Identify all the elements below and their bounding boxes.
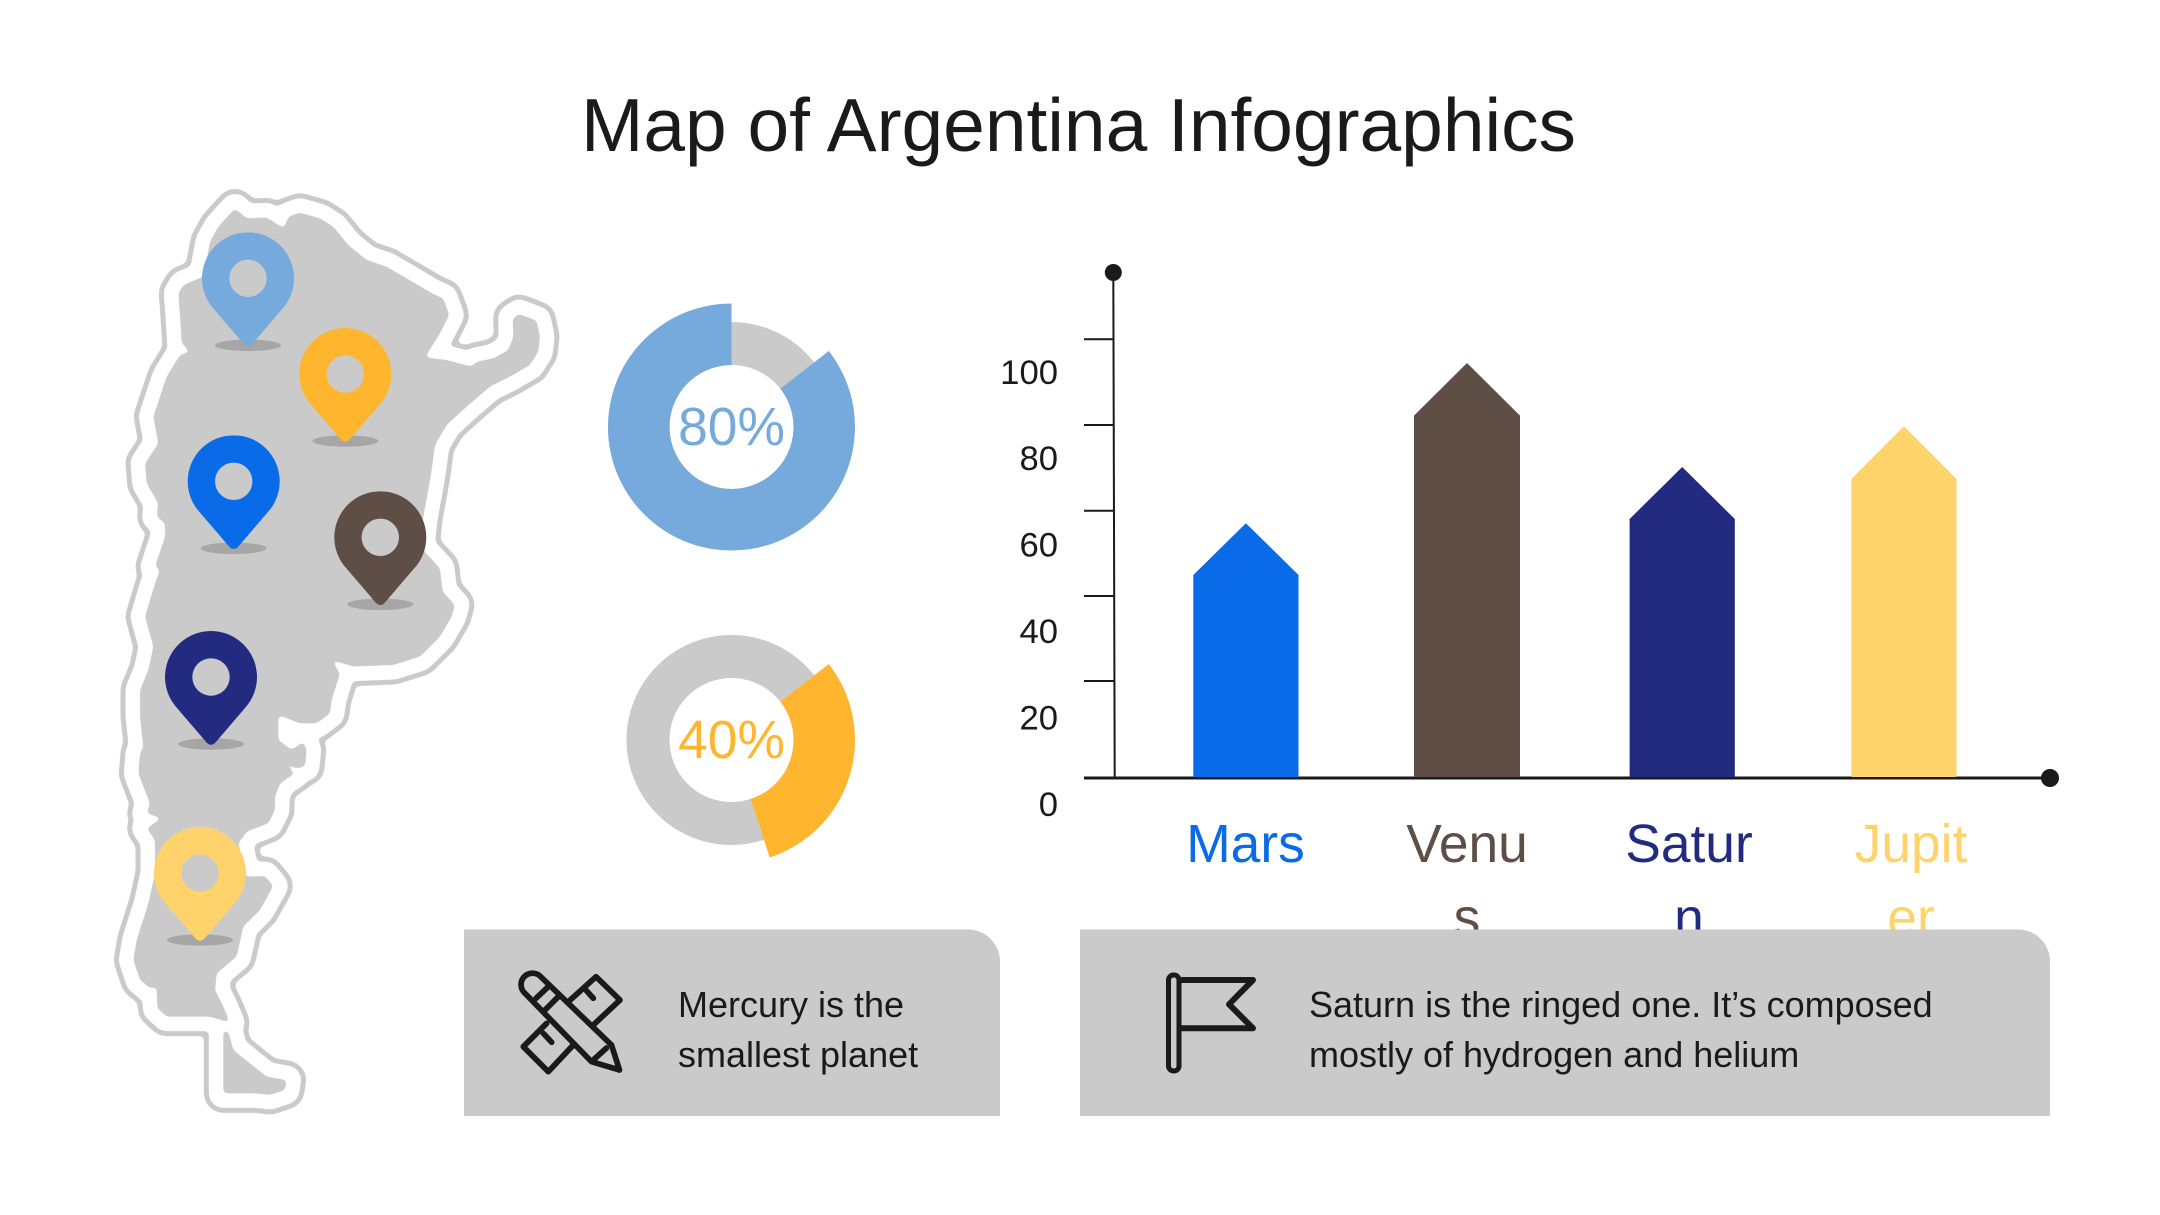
- title: Map of Argentina Infographics: [581, 83, 1576, 167]
- pin: brown: [334, 491, 426, 610]
- y axis labels: 60: [1019, 526, 1058, 564]
- donut chart: 40%: 40%: [678, 711, 785, 770]
- icon: pencil and ruler: [521, 973, 620, 1072]
- bar: Saturn: [1630, 467, 1735, 777]
- text: Saturn: mostly of hydrogen and helium: [1309, 1034, 1799, 1075]
- donut chart: 80%: 80%: [678, 398, 785, 457]
- map of Argentina with pins: [133, 208, 540, 1095]
- pin: orange: [299, 328, 391, 447]
- panel: Mercury: [464, 930, 1000, 1116]
- label: Jupiter: er: [1887, 889, 1935, 948]
- label: Venus: s: [1454, 889, 1480, 948]
- bar chart: [1000, 264, 2059, 948]
- map silhouette with offset outline: [133, 208, 540, 1095]
- label: Jupiter: Jupit: [1855, 815, 1968, 874]
- y axis labels: [1000, 354, 1058, 824]
- donut chart: 80%: [608, 304, 855, 550]
- bar: Venus: [1414, 363, 1520, 777]
- text: Mercury: smallest planet: [678, 1034, 918, 1075]
- y axis labels: 100: [1000, 354, 1058, 392]
- bar: Mars: [1193, 523, 1298, 777]
- pin: yellow: [154, 827, 246, 946]
- label: Saturn: Satur: [1625, 815, 1753, 874]
- label: Saturn: n: [1674, 889, 1704, 948]
- y axis labels: 80: [1019, 440, 1058, 478]
- y axis labels: 0: [1039, 786, 1058, 824]
- y axis labels: 40: [1019, 613, 1058, 651]
- donut chart: 40%: [648, 656, 855, 858]
- axes: [1084, 264, 2059, 787]
- text: Mercury: Mercury is the: [678, 984, 904, 1025]
- pin: navy: [165, 631, 257, 750]
- y axis labels: 20: [1019, 700, 1058, 738]
- pin: blue: [188, 435, 280, 554]
- bar: Jupiter: [1851, 426, 1956, 777]
- panel: Saturn: [1080, 930, 2050, 1116]
- label: Mars: Mars: [1186, 815, 1305, 874]
- label: Venus: Venu: [1406, 815, 1528, 874]
- icon: flag: [1168, 975, 1253, 1071]
- text: Saturn: Saturn is the ringed one. It’s composed: [1309, 984, 1933, 1025]
- pin: light blue: [202, 232, 294, 351]
